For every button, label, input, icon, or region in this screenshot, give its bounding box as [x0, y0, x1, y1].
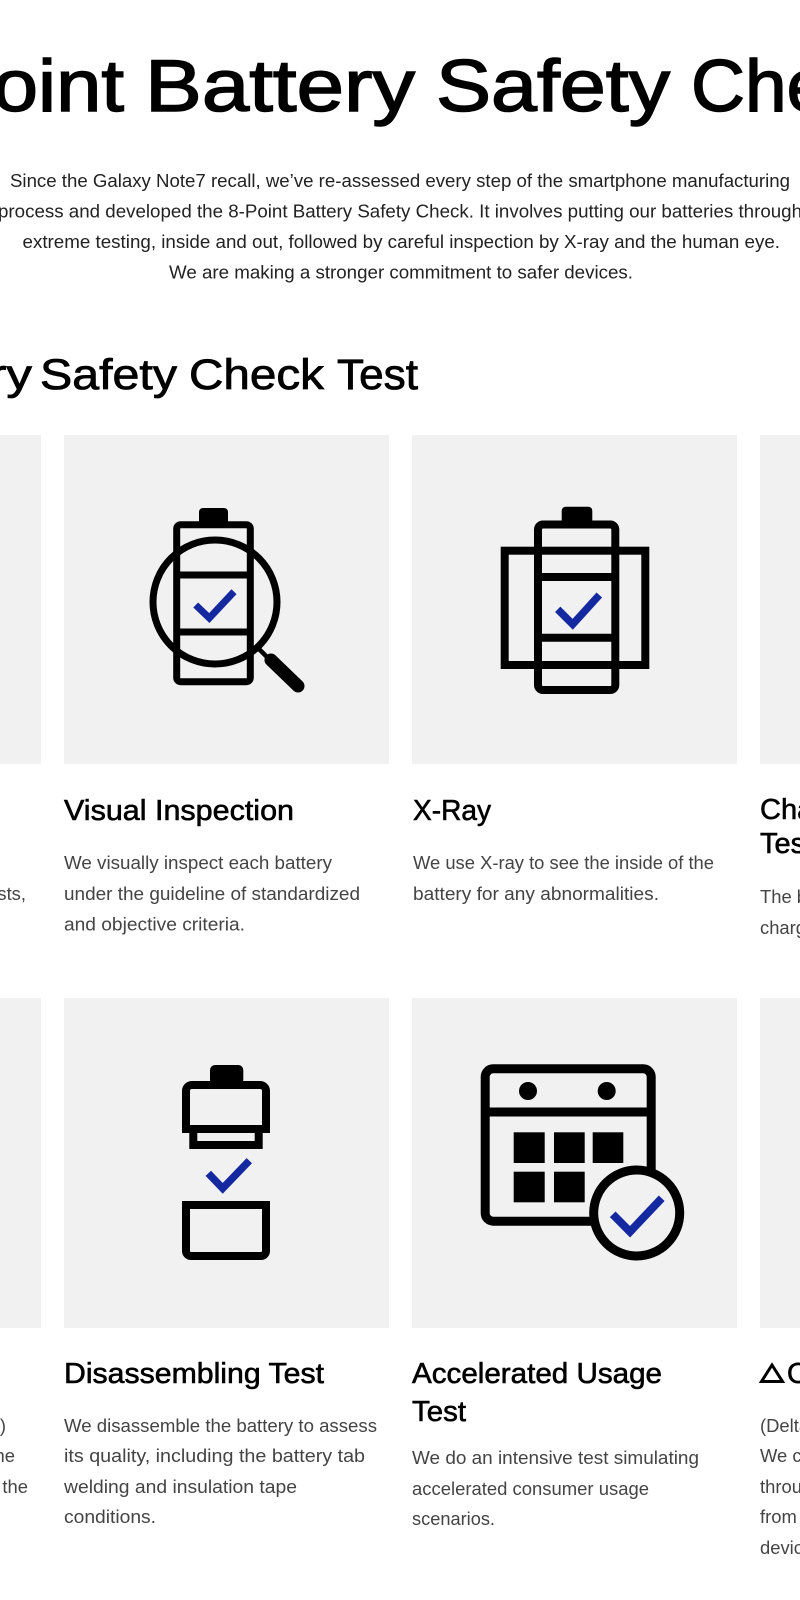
card: accelerated usage test — [412, 998, 737, 1529]
card description — [412, 1447, 699, 1529]
icon: battery in x-ray frame — [505, 507, 645, 690]
intro text — [0, 170, 800, 282]
card: clipped left, row 1 — [0, 435, 41, 904]
title: Battery — [145, 46, 416, 127]
card: clipped left, row 2 — [0, 998, 41, 1497]
card: clipped left, row 2: the — [2, 1476, 28, 1497]
icon: battery under magnifying glass — [153, 508, 298, 686]
title: Safety — [436, 46, 671, 127]
card description — [413, 852, 714, 904]
card: delta OCV test — [760, 998, 800, 1558]
card description: welding and insulation tape — [63, 1476, 297, 1497]
intro text: extreme testing, inside and out, followed by careful inspection by X-ray and the human eye. — [22, 231, 780, 252]
card description — [760, 886, 800, 938]
section heading: Test — [337, 351, 418, 399]
icon: calendar with check — [485, 1069, 680, 1256]
card description — [63, 1415, 377, 1527]
card heading: Visual Inspection — [64, 795, 294, 827]
card heading: Accelerated Usage — [412, 1358, 662, 1390]
card description: We use X-ray to see the inside of the — [413, 852, 714, 873]
section heading — [0, 351, 418, 399]
card heading: Disassembling Test — [64, 1358, 324, 1390]
card heading: Test — [412, 1396, 466, 1428]
card heading — [412, 1358, 662, 1428]
card description: and objective criteria. — [64, 914, 245, 934]
card description: conditions. — [64, 1506, 156, 1527]
card description: We disassemble the battery to assess — [64, 1415, 377, 1436]
section heading: Check — [189, 351, 325, 399]
card description: its quality, including the battery tab — [64, 1445, 365, 1466]
card description — [760, 1415, 800, 1558]
card description: under the guideline of standardized — [64, 883, 360, 904]
card description: accelerated consumer usage — [412, 1478, 649, 1499]
card: charge and discharge test — [760, 435, 800, 938]
card heading: X-Ray — [413, 795, 491, 827]
card heading — [760, 794, 800, 860]
intro text: Since the Galaxy Note7 recall, we’ve re-assessed every step of the smartphone manufacturing — [10, 170, 790, 191]
card description: battery for any abnormalities. — [413, 883, 659, 904]
card: disassembling test — [63, 998, 389, 1527]
title — [0, 46, 800, 127]
card: clipped left, row 2: ) — [0, 1415, 6, 1436]
card description: We do an intensive test simulating — [412, 1447, 699, 1468]
icon: separated battery — [186, 1065, 266, 1256]
section heading: Safety — [40, 351, 178, 399]
card description — [64, 852, 360, 934]
card: visual inspection — [64, 435, 389, 934]
card description: We visually inspect each battery — [64, 852, 333, 873]
card description: scenarios. — [412, 1508, 495, 1529]
intro text: process and developed the 8-Point Battery Safety Check. It involves putting our batteries through — [0, 200, 800, 222]
card: x-ray — [412, 435, 737, 904]
card heading — [762, 1358, 800, 1390]
intro text: We are making a stronger commitment to safer devices. — [169, 262, 633, 282]
